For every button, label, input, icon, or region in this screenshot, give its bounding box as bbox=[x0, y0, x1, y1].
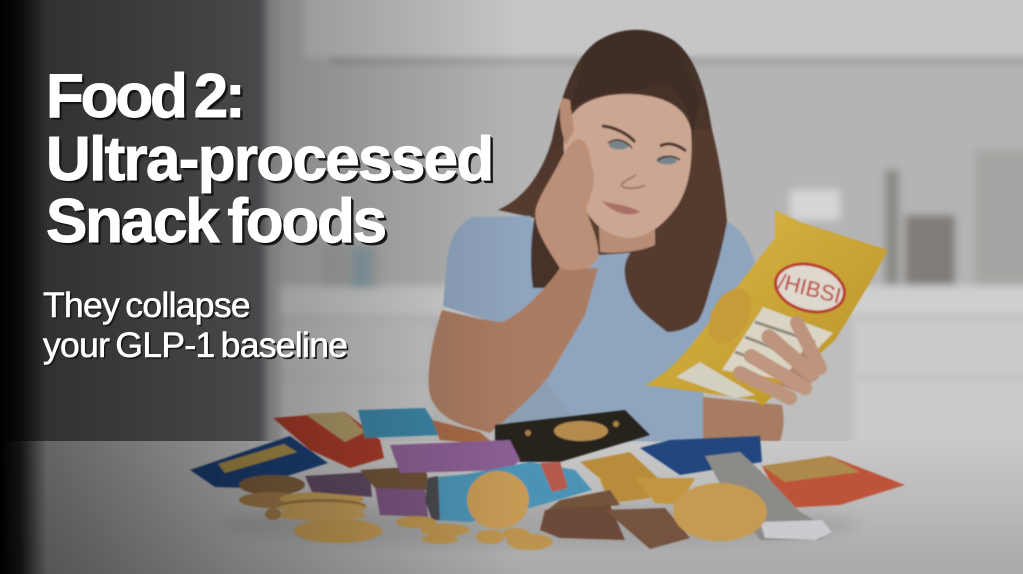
snack pile bbox=[190, 408, 905, 550]
hand holding bag bbox=[740, 323, 820, 398]
purple bag bbox=[390, 440, 520, 473]
dark cookie bag bbox=[495, 410, 650, 462]
right hair lock bbox=[625, 130, 727, 332]
bag brand badge: /HIBSI bbox=[776, 269, 844, 308]
title bbox=[46, 62, 494, 256]
red bag bbox=[273, 412, 384, 468]
eyes and brows bbox=[602, 126, 686, 214]
left dark gradient overlay bbox=[0, 0, 520, 574]
bag ingredient panels bbox=[676, 307, 833, 398]
small blue bag bbox=[358, 408, 442, 438]
crumbs bbox=[396, 516, 553, 550]
bag chip illustration bbox=[700, 281, 760, 351]
hair back bbox=[498, 30, 727, 260]
blue bag right bbox=[640, 436, 762, 475]
right arm bbox=[703, 397, 783, 441]
face bbox=[564, 94, 692, 238]
chip bag bbox=[645, 210, 888, 406]
left arm bbox=[429, 268, 598, 433]
neck bbox=[598, 205, 655, 253]
yellow crackers bbox=[580, 452, 695, 505]
title: Food 2: bbox=[46, 62, 242, 131]
left hair lock bbox=[531, 215, 560, 288]
woman bbox=[429, 30, 783, 442]
large round cracker right bbox=[673, 483, 767, 541]
table top bbox=[0, 441, 1023, 574]
blue cylinder pack bbox=[425, 462, 592, 522]
subtitle bbox=[42, 285, 348, 366]
bag brand badge bbox=[770, 257, 850, 319]
shirt bbox=[443, 215, 755, 442]
hand on cheek bbox=[535, 139, 598, 270]
hair fringe bbox=[570, 32, 700, 140]
red bag right bbox=[762, 456, 905, 508]
subtitle: your GLP-1 baseline bbox=[43, 325, 347, 365]
orange wrapper bbox=[432, 420, 495, 445]
chocolate wafers bbox=[540, 490, 690, 549]
title: Snack foods bbox=[46, 187, 385, 256]
subtitle: They collapse bbox=[43, 285, 250, 325]
title: Ultra-processed bbox=[46, 124, 493, 194]
large round cracker centre bbox=[467, 471, 529, 529]
cookie stack left bbox=[239, 475, 382, 543]
purple packs bbox=[305, 466, 430, 517]
clear plastic wrapper bbox=[705, 452, 832, 540]
blue bag left bbox=[190, 436, 328, 488]
